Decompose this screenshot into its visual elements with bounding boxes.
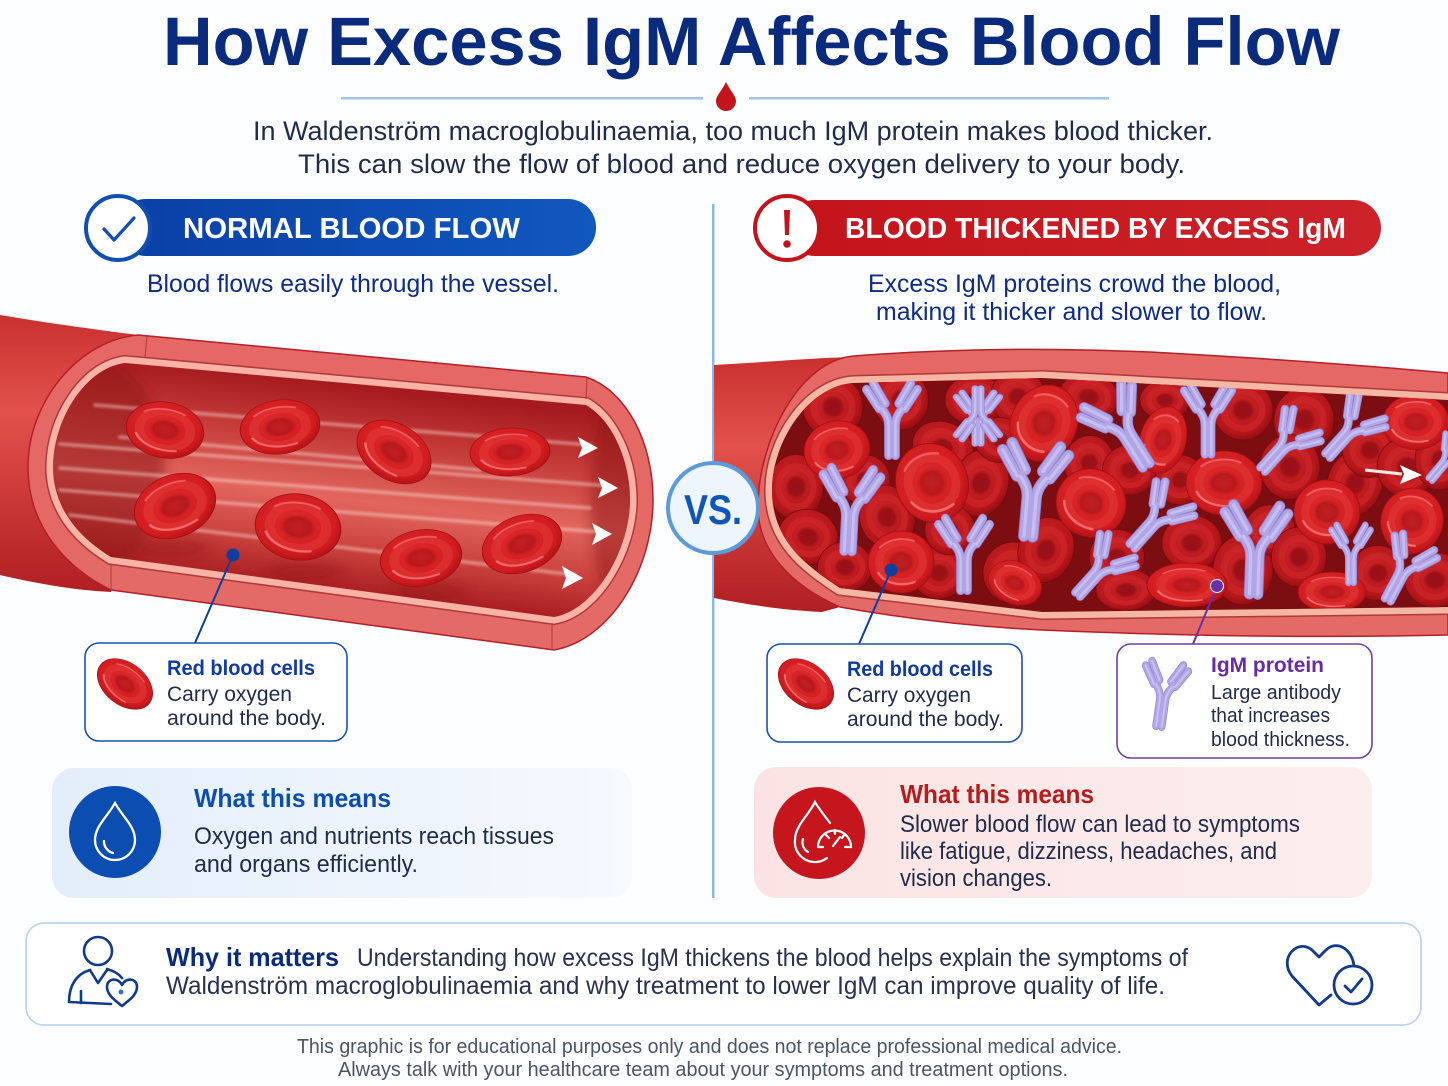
callout: red blood cells (thick): around the body. — [847, 708, 1004, 731]
VS badge — [668, 463, 758, 553]
callout: red blood cells (thick): Carry oxygen — [847, 684, 971, 707]
panel: why it matters: Waldenström macroglobulinaemia and why treatment to lower IgM can improve quality of life. — [166, 972, 1165, 1000]
thickened flow caption: making it thicker and slower to flow. — [876, 298, 1267, 326]
icon: red blood cell — [88, 648, 162, 720]
panel: normal blood flow header — [86, 196, 596, 260]
normal flow caption: Blood flows easily through the vessel. — [147, 270, 559, 298]
footer disclaimer — [297, 1036, 1122, 1081]
callout: red blood cells (thick): Red blood cells — [847, 658, 993, 681]
white flow streak and arrow — [1365, 470, 1402, 474]
panel: what this means (normal): and organs efficiently. — [194, 851, 418, 878]
IgM antibodies — [820, 380, 1448, 611]
panel: normal blood flow header: NORMAL BLOOD FLOW — [183, 213, 521, 245]
callout: red blood cells (normal): around the body. — [167, 707, 326, 730]
callout: IgM protein: Large antibody — [1211, 682, 1341, 704]
icon: IgM antibody — [1137, 660, 1189, 729]
panel: what this means (thick) — [754, 767, 1372, 898]
red blood cells — [122, 396, 208, 464]
centre divider — [712, 204, 714, 898]
foreground red blood cells — [799, 374, 1448, 614]
panel: thickened blood header: BLOOD THICKENED BY EXCESS IgM — [845, 213, 1346, 245]
panel: what this means (normal): Oxygen and nutrients reach tissues — [194, 823, 554, 850]
callout pointer: red blood cell — [195, 548, 240, 643]
flow streaks — [60, 405, 610, 575]
callout: red blood cells (thick) — [767, 644, 1022, 742]
callout: IgM protein — [1117, 644, 1372, 758]
callout: red blood cells (normal) — [85, 643, 347, 741]
icon: red blood cell — [769, 648, 843, 720]
icon: heart with check — [1287, 946, 1372, 1005]
footer disclaimer: Always talk with your healthcare team about your symptoms and treatment options. — [338, 1059, 1068, 1081]
intro text: In Waldenström macroglobulinaemia, too much IgM protein makes blood thicker. — [253, 116, 1213, 146]
callout: red blood cells (normal): Red blood cells — [167, 657, 315, 680]
thickened flow caption: Excess IgM proteins crowd the blood, — [868, 270, 1281, 298]
wall section lines — [111, 336, 587, 650]
callout pointer: IgM protein — [1193, 580, 1224, 644]
callout: IgM protein: blood thickness. — [1211, 729, 1350, 751]
icon: drop with gauge — [795, 802, 851, 862]
callout pointer: red blood cell (thick) — [859, 564, 898, 644]
callout: IgM protein: that increases — [1211, 705, 1330, 727]
crowded background cells — [768, 368, 1448, 613]
footer disclaimer: This graphic is for educational purposes only and does not replace professional medical advice. — [297, 1036, 1122, 1058]
title divider with blood drop — [341, 82, 1109, 111]
panel: what this means (thick): vision changes. — [900, 865, 1052, 892]
title: How Excess IgM Affects Blood Flow — [163, 3, 1340, 80]
callout: IgM protein: IgM protein — [1211, 654, 1324, 677]
icon: person with heart — [69, 937, 137, 1006]
intro text — [253, 116, 1213, 179]
intro text: This can slow the flow of blood and reduce oxygen delivery to your body. — [298, 149, 1185, 179]
panel: why it matters: Understanding how excess IgM thickens the blood helps explain the symptoms of — [357, 944, 1188, 972]
panel: why it matters — [26, 923, 1421, 1025]
thickened flow caption — [868, 270, 1281, 326]
panel: why it matters: Why it matters — [166, 942, 339, 972]
panel: what this means (thick): like fatigue, dizziness, headaches, and — [900, 838, 1277, 865]
flow arrows — [562, 437, 618, 589]
callout: red blood cells (normal): Carry oxygen — [167, 683, 292, 706]
VS badge: VS. — [684, 486, 742, 533]
normal blood vessel illustration — [0, 315, 653, 650]
panel: what this means (normal): What this means — [194, 783, 391, 813]
panel: thickened blood header — [755, 196, 1381, 260]
thickened blood vessel illustration — [714, 349, 1448, 636]
panel: what this means (normal) — [52, 768, 632, 898]
panel: what this means (thick): Slower blood flow can lead to symptoms — [900, 811, 1300, 838]
panel: what this means (thick): What this means — [900, 779, 1094, 809]
